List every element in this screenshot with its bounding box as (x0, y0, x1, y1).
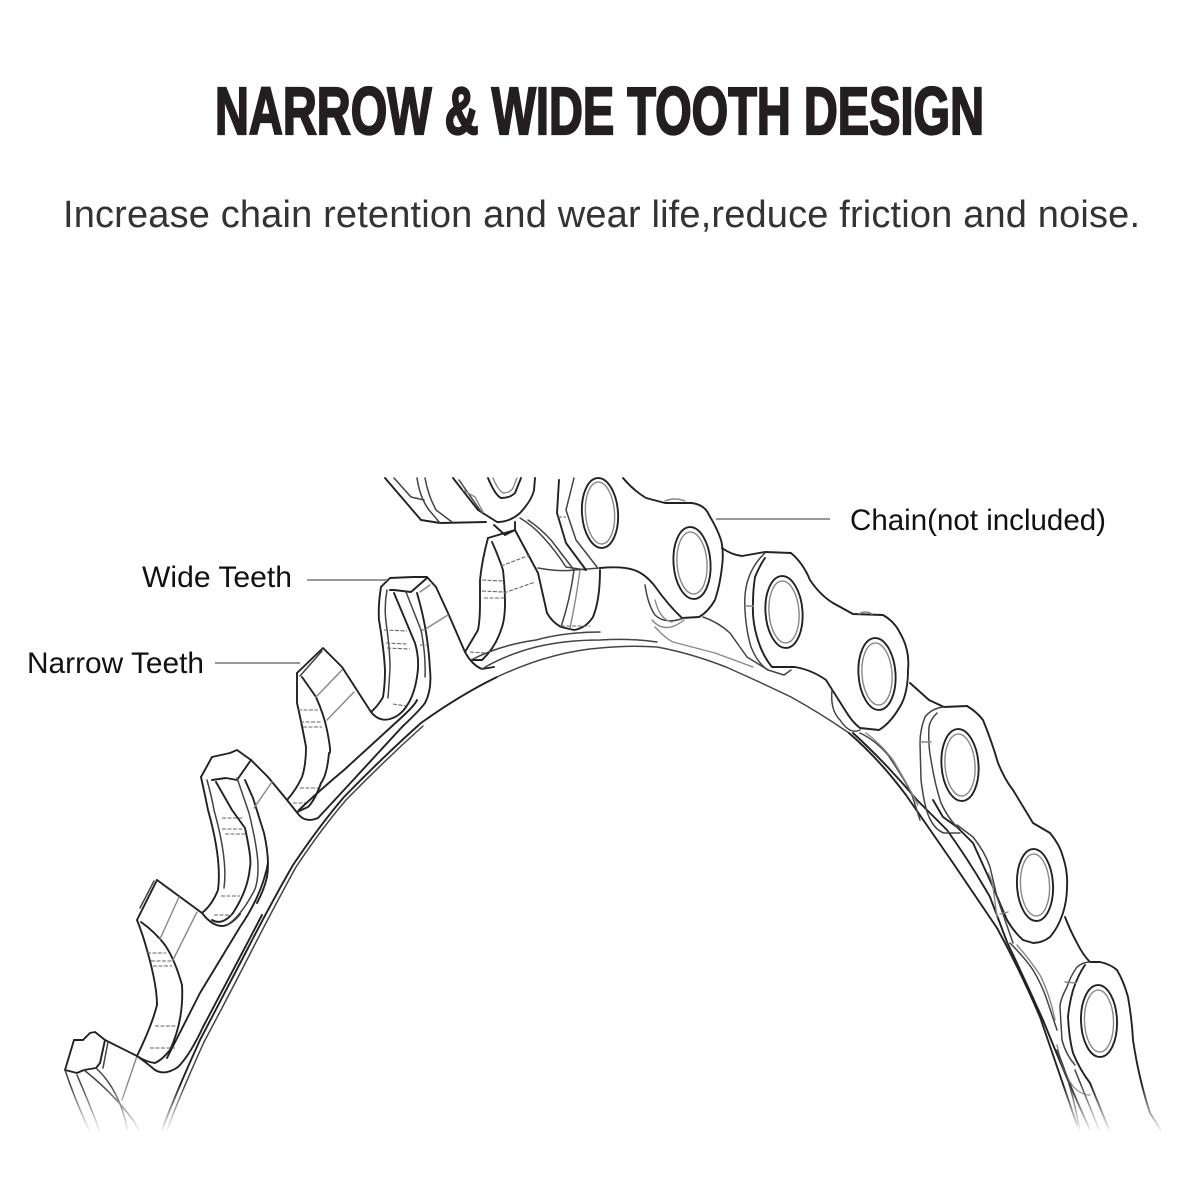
subtitle: Increase chain retention and wear life,reduce friction and noise. (63, 194, 1140, 236)
chain: inner link below (860, 733, 920, 820)
chain: outer link with hole 6 (1057, 917, 1162, 1132)
tooth: wide centre (371, 577, 494, 712)
tooth: wide left (201, 670, 430, 925)
label: narrow teeth: Narrow Teeth (27, 647, 204, 680)
chain: link with hole 1 (600, 478, 723, 628)
chain: outer link with holes 4 and 5 (910, 683, 1067, 1030)
tooth: narrow under chain (465, 530, 657, 669)
bottom fade mask (0, 1085, 1200, 1133)
chain: top-left links (385, 478, 597, 570)
chain hole 0 (580, 477, 620, 549)
tooth: narrow lower-left (137, 880, 240, 1063)
label: chain: Chain(not included) (850, 504, 1106, 537)
diagram: chainring and chain line drawing (65, 477, 1162, 1135)
tooth: narrow centre-left with label target (287, 648, 417, 812)
label: wide teeth: Wide Teeth (142, 561, 292, 594)
tooth: wide bottom-left (65, 1032, 178, 1132)
chainring rim arc (160, 646, 1090, 1135)
chain: outer link with holes 2 and 3 (655, 548, 908, 731)
